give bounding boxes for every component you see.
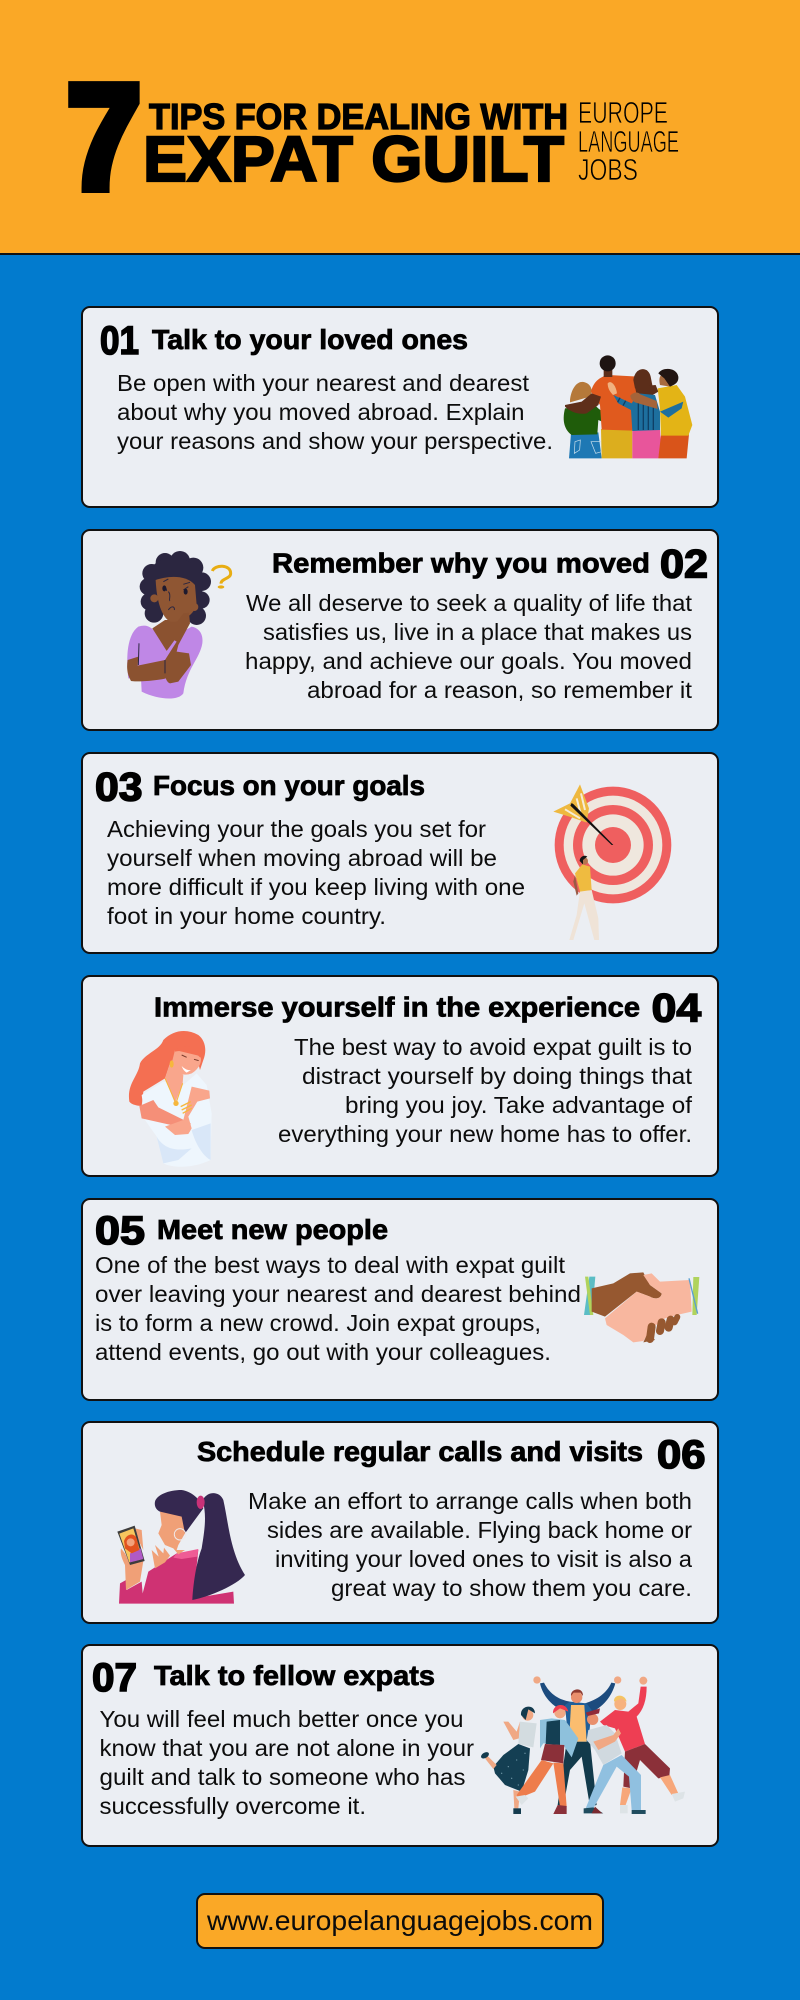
- heading: schedule regular calls and visits: Schedule regular calls and visits: [197, 1436, 643, 1467]
- body text: Be open with your nearest and dearest: [117, 370, 529, 396]
- number 04: 04: [652, 987, 702, 1031]
- body text: is to form a new crowd. Join expat groups,: [95, 1310, 541, 1336]
- body text: [100, 1706, 474, 1819]
- body text: more difficult if you keep living with one: [107, 874, 525, 900]
- title numeral 7: 7: [67, 55, 141, 220]
- heading: talk to fellow expats: Talk to fellow expats: [154, 1660, 435, 1691]
- icon: woman on video call: [117, 1490, 245, 1604]
- body text: Make an effort to arrange calls when both: [248, 1488, 692, 1514]
- number 02: 02: [660, 543, 708, 587]
- heading: remember why you moved: Remember why you moved: [272, 548, 650, 579]
- body text: foot in your home country.: [107, 903, 386, 929]
- icon: woman hugging herself: [129, 1031, 212, 1167]
- number 05: 05: [95, 1209, 145, 1253]
- body text: distract yourself by doing things that: [302, 1063, 692, 1089]
- body text: successfully overcome it.: [100, 1793, 366, 1819]
- heading: immerse yourself in the experience: Immerse yourself in the experience: [154, 992, 640, 1023]
- body text: [278, 1034, 692, 1147]
- heading: meet new people: Meet new people: [157, 1214, 388, 1245]
- body text: inviting your loved ones to visit is also a: [275, 1546, 693, 1572]
- icon: thinking woman: [127, 551, 231, 699]
- logo: [578, 96, 679, 187]
- number 03: 03: [95, 766, 142, 810]
- body text: [117, 370, 553, 454]
- body text: [245, 590, 692, 703]
- body text: guilt and talk to someone who has: [100, 1764, 466, 1790]
- footer website button: [197, 1894, 603, 1948]
- body text: great way to show them you care.: [331, 1575, 692, 1601]
- body text: about why you moved abroad. Explain: [117, 399, 524, 425]
- icon: group of friends cheering: [480, 1676, 685, 1814]
- header band: [0, 0, 800, 255]
- panel: tip 1: [82, 307, 718, 507]
- panel: tip 3: [82, 753, 718, 953]
- icon: question mark: [212, 566, 231, 589]
- panel: tip 4: [82, 976, 718, 1176]
- body text: sides are available. Flying back home or: [267, 1517, 692, 1543]
- panel: tip 5: [82, 1199, 718, 1400]
- panel: tip 2: [82, 530, 718, 730]
- body text: Achieving your the goals you set for: [107, 816, 486, 842]
- body text: You will feel much better once you: [100, 1706, 464, 1732]
- body text: know that you are not alone in your: [100, 1735, 474, 1761]
- body text: everything your new home has to offer.: [278, 1121, 692, 1147]
- heading: talk to your loved ones: Talk to your loved ones: [152, 324, 468, 355]
- icon: handshake: [584, 1272, 699, 1342]
- icon: target and arrow: [553, 784, 671, 940]
- body text: abroad for a reason, so remember it: [307, 677, 692, 703]
- body text: over leaving your nearest and dearest behind: [95, 1281, 581, 1307]
- body text: [107, 816, 525, 929]
- body text: yourself when moving abroad will be: [107, 845, 497, 871]
- logo: JOBS: [578, 153, 638, 187]
- body text: attend events, go out with your colleagues.: [95, 1339, 551, 1365]
- logo: EUROPE: [578, 96, 668, 130]
- body text: One of the best ways to deal with expat guilt: [95, 1252, 565, 1278]
- title line 1: TIPS FOR DEALING WITH: [149, 96, 568, 137]
- panel: tip 6: [82, 1422, 718, 1623]
- number 07: 07: [92, 1656, 137, 1700]
- body text: We all deserve to seek a quality of life that: [246, 590, 692, 616]
- number 01: 01: [100, 319, 139, 363]
- panel: tip 7: [82, 1645, 718, 1846]
- body text: your reasons and show your perspective.: [117, 428, 553, 454]
- footer website button: www.europelanguagejobs.com: [206, 1905, 593, 1936]
- title line 2: EXPAT GUILT: [143, 123, 564, 195]
- icon: group hugging: [564, 355, 692, 458]
- number 06: 06: [657, 1433, 706, 1477]
- title: [67, 55, 568, 220]
- body text: [248, 1488, 693, 1601]
- body text: [95, 1252, 581, 1365]
- body text: satisfies us, live in a place that makes us: [263, 619, 692, 645]
- logo: LANGUAGE: [578, 125, 679, 159]
- body text: bring you joy. Take advantage of: [345, 1092, 692, 1118]
- body text: happy, and achieve our goals. You moved: [245, 648, 692, 674]
- heading: focus on your goals: Focus on your goals: [153, 770, 425, 801]
- body text: The best way to avoid expat guilt is to: [294, 1034, 692, 1060]
